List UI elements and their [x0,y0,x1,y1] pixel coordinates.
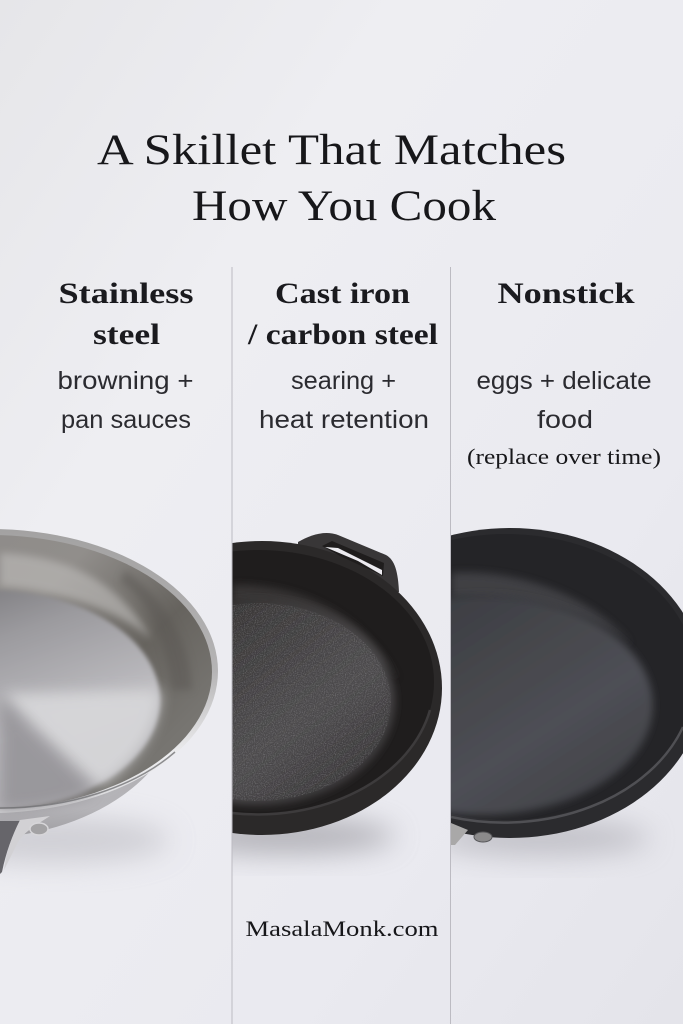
heading: stainless steel: steel [93,318,160,351]
text: cast iron uses: searing + [291,367,396,395]
text: nonstick uses: eggs + delicate [476,367,652,395]
heading: nonstick: Nonstick [498,277,635,310]
title: How You Cook [192,183,497,230]
heading: cast iron / carbon steel: Cast iron [275,277,410,310]
floor texture [232,603,391,801]
text: nonstick uses: (replace over time) [467,444,661,469]
floor light wedge [2,690,160,786]
outer body [232,541,442,835]
text: cast iron uses: heat retention [259,406,429,434]
inner wall [316,534,683,820]
shadow [0,816,170,864]
heading: cast iron / carbon steel [247,277,438,351]
cast iron skillet [232,533,442,868]
outer body [451,528,683,838]
panel: nonstick text [467,277,661,469]
rim front shadow line [0,752,175,808]
handle [298,533,399,592]
text: nonstick uses [467,367,661,469]
outer body [0,772,149,834]
pan floor [451,596,656,818]
panel: stainless steel text [58,277,194,434]
handle [0,821,20,874]
text: stainless steel uses: browning + [58,367,194,395]
shadow [430,820,650,856]
text: cast iron uses [259,367,429,434]
handle inner wall [322,541,384,576]
rim front [232,710,430,814]
wall soft light [451,570,622,635]
inner wall [0,535,212,809]
rim [0,529,218,813]
rivet [474,832,492,842]
column dividers [232,267,451,1024]
title: A Skillet That Matches [97,127,566,174]
shadow [175,818,395,854]
text: nonstick uses: food [537,406,593,434]
panel: cast iron text [247,277,438,434]
rivet [30,823,48,835]
heading: stainless steel [58,277,194,351]
heading: cast iron / carbon steel: / carbon steel [247,318,438,351]
handle stub [451,823,468,845]
wall highlights [0,553,152,640]
inner wall [232,550,434,813]
website credit: MasalaMonk.com [246,916,438,941]
rim front [451,727,683,823]
pan floor [232,602,398,808]
heading: stainless steel: Stainless [58,277,194,310]
title [97,127,566,230]
stainless steel skillet [0,529,218,874]
text: stainless steel uses: pan sauces [61,406,191,434]
handle opening [325,547,382,575]
text: stainless steel uses [58,367,194,434]
wall soft light [232,583,382,656]
nonstick skillet [451,528,683,868]
pan floor [0,590,160,810]
